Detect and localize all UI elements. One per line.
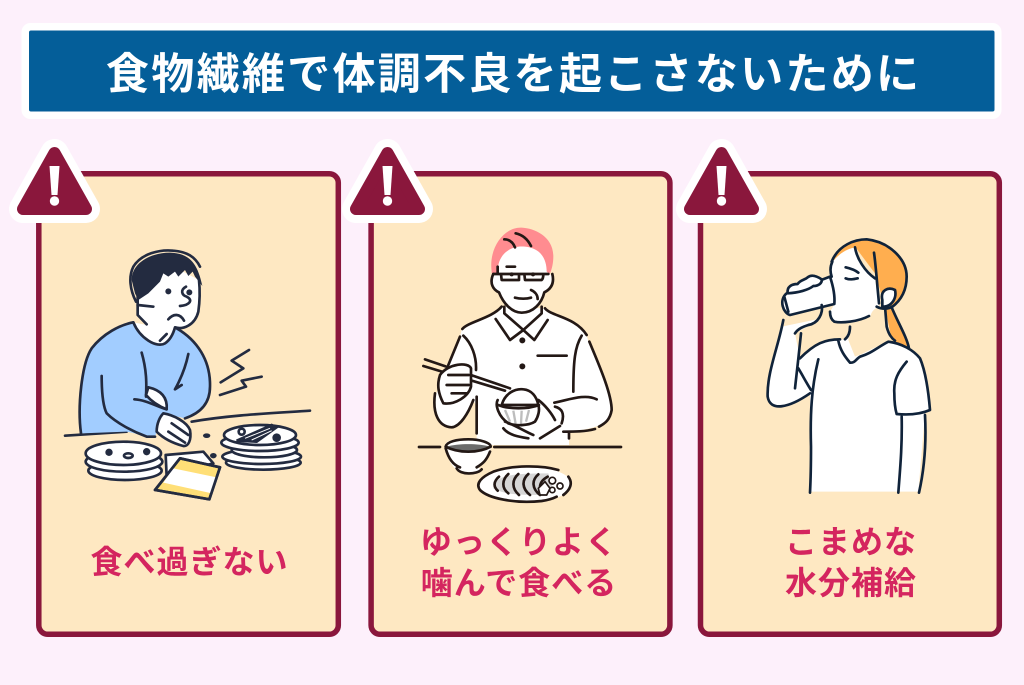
rice bowl xyxy=(502,389,538,405)
title: 食物繊維で体調不良を起こさないために xyxy=(106,51,919,99)
label: frequent hydration: こまめな xyxy=(785,524,917,560)
fish plate xyxy=(479,466,572,502)
chopsticks xyxy=(423,359,510,391)
label: chew slowly xyxy=(420,524,618,601)
panel: frequent hydration xyxy=(690,153,999,634)
label: don't overeat: 食べ過ぎない xyxy=(90,544,289,580)
snack bag xyxy=(155,452,220,499)
illustration: man with full stomach xyxy=(65,250,310,499)
table line xyxy=(419,443,621,451)
icon: warning triangle 1 xyxy=(23,153,86,209)
illustration: man eating with chopsticks xyxy=(419,228,621,502)
illustration: woman drinking xyxy=(768,239,930,493)
panel: chew slowly xyxy=(356,153,670,634)
panel: don't overeat xyxy=(23,153,338,634)
soup bowl xyxy=(446,439,491,474)
label: chew slowly: 噛んで食べる xyxy=(421,565,617,601)
plates: left stack xyxy=(86,442,162,480)
label: frequent hydration xyxy=(785,524,917,601)
icon: warning triangle 2 xyxy=(356,153,419,209)
label: frequent hydration: 水分補給 xyxy=(785,565,917,601)
plates: right stack xyxy=(221,425,301,470)
label: chew slowly: ゆっくりよく xyxy=(420,524,618,560)
title banner xyxy=(22,23,1002,119)
icon: warning triangle 3 xyxy=(690,153,753,209)
